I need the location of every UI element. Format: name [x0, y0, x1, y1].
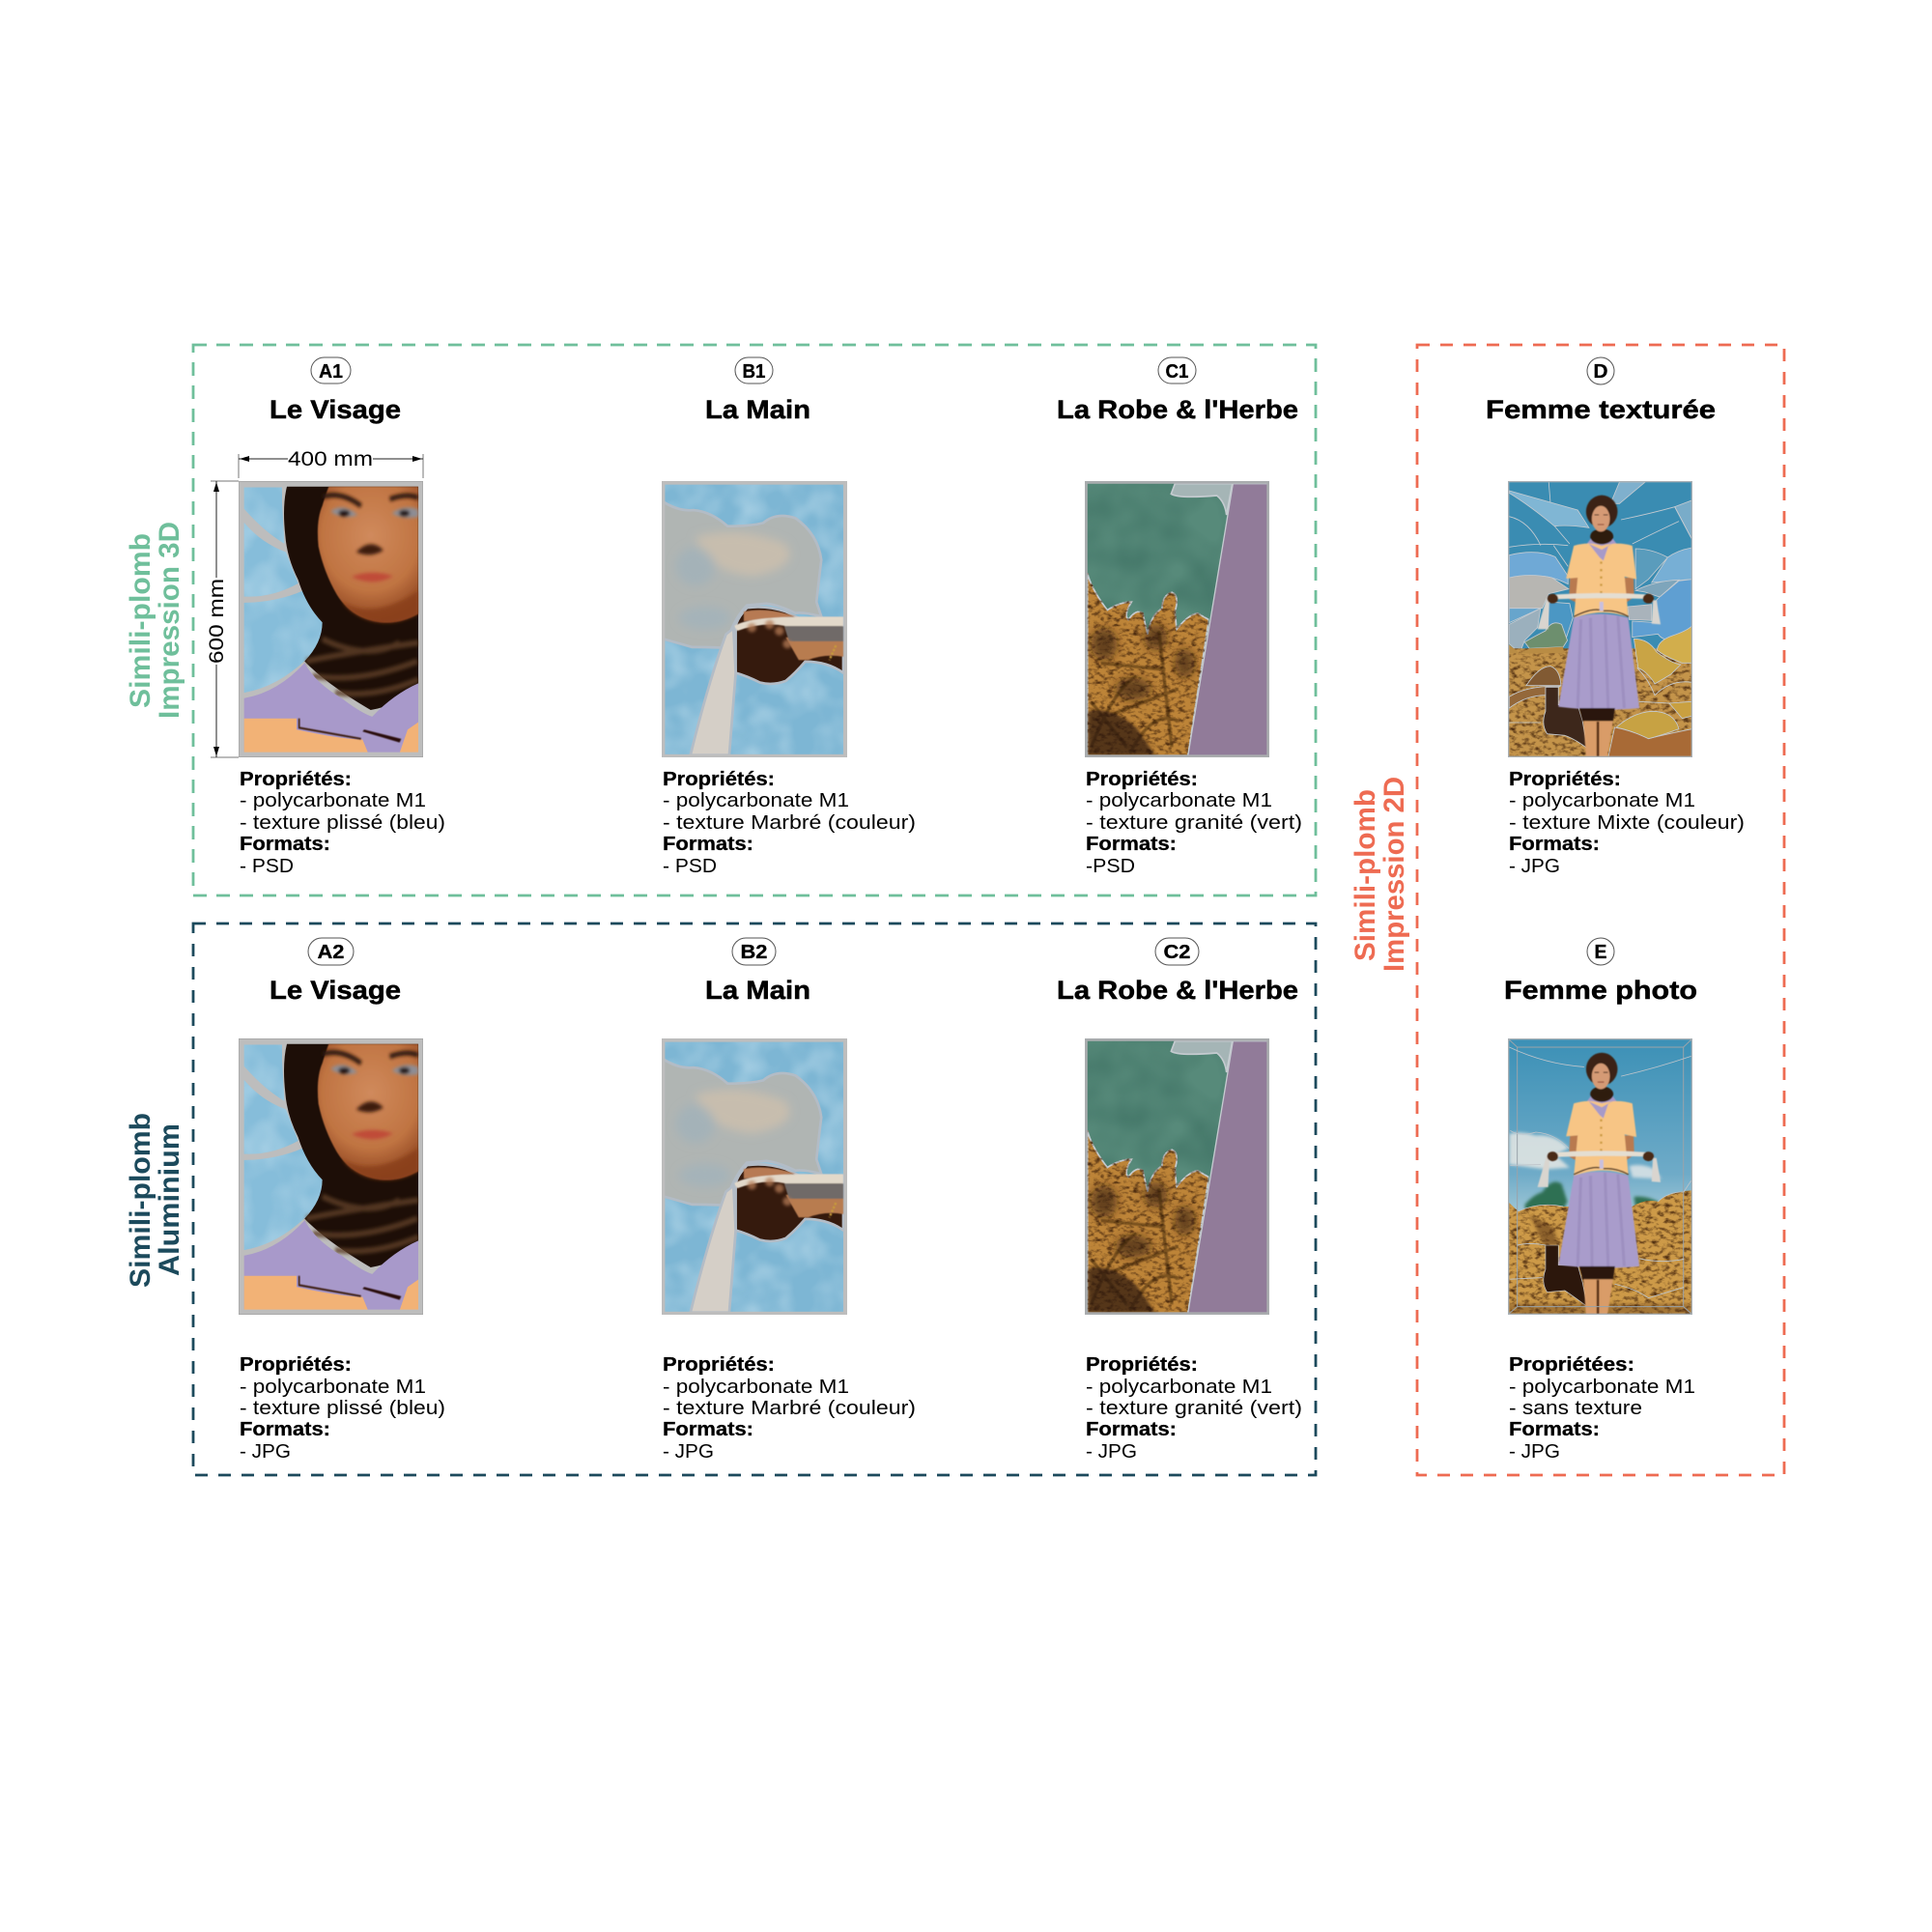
properties A1 [240, 768, 445, 877]
properties C2: - texture granité (vert) [1086, 1397, 1302, 1419]
properties D: - polycarbonate M1 [1509, 789, 1695, 811]
properties A2: Formats: [240, 1418, 330, 1440]
properties E [1509, 1353, 1695, 1463]
panel: Simili-plomb Impression 3D [125, 345, 1316, 895]
properties C2: - polycarbonate M1 [1086, 1376, 1272, 1398]
properties C2: Propriétés: [1086, 1353, 1198, 1376]
badge A2 [308, 938, 354, 965]
properties A1: - polycarbonate M1 [240, 789, 426, 811]
properties C1: - texture granité (vert) [1086, 811, 1302, 834]
badge D [1587, 357, 1614, 384]
properties D: - JPG [1509, 855, 1560, 877]
product E [1504, 938, 1697, 1463]
properties E: Formats: [1509, 1418, 1600, 1440]
properties B2: - texture Marbré (couleur) [663, 1397, 916, 1419]
label: Simili-plomb Impression 2D: Impression 2D [1378, 777, 1410, 972]
product C2 [1057, 938, 1302, 1463]
properties B1: - PSD [663, 855, 717, 877]
properties C1: -PSD [1086, 855, 1135, 877]
properties A1: - texture plissé (bleu) [240, 811, 445, 834]
properties B2 [663, 1353, 916, 1463]
panel: Simili-plomb Impression 2D [1350, 345, 1784, 1475]
properties D [1509, 768, 1745, 877]
label: Simili-plomb Aluminium: Simili-plomb [125, 1113, 156, 1288]
product C1 [1057, 357, 1302, 877]
image: la main texture [662, 481, 847, 757]
label: Simili-plomb Aluminium [125, 1113, 185, 1288]
label: Simili-plomb Impression 2D [1350, 777, 1410, 972]
image: la robe et herbe texture [1085, 481, 1269, 757]
badge C1 [1158, 357, 1196, 384]
title La Main: La Main [705, 395, 810, 424]
properties E: - sans texture [1509, 1397, 1642, 1419]
properties C2 [1086, 1353, 1302, 1463]
properties B2: - polycarbonate M1 [663, 1376, 849, 1398]
properties B2: - JPG [663, 1440, 714, 1463]
label: Simili-plomb Impression 3D: Impression 3D [154, 522, 185, 719]
image: le visage aluminium [239, 1038, 423, 1315]
badge A2: A2 [317, 942, 344, 963]
properties E: - JPG [1509, 1440, 1560, 1463]
dimension: 400 mm [239, 448, 423, 478]
image: le visage texture [239, 481, 423, 757]
badge D: D [1594, 361, 1607, 383]
title Le Visage: Le Visage [270, 395, 401, 424]
properties A2: - JPG [240, 1440, 291, 1463]
badge E [1587, 938, 1614, 965]
properties D: - texture Mixte (couleur) [1509, 811, 1745, 834]
image: la main aluminium [662, 1038, 847, 1315]
properties B1: Formats: [663, 833, 753, 855]
label: Simili-plomb Impression 2D: Simili-plomb [1350, 789, 1381, 961]
label: Simili-plomb Aluminium: Aluminium [154, 1123, 185, 1276]
properties D: Propriétés: [1509, 768, 1621, 790]
properties B1 [663, 768, 916, 877]
badge A1 [311, 357, 351, 384]
image: la robe et herbe aluminium [1085, 1038, 1269, 1315]
properties A1: Propriétés: [240, 768, 352, 790]
badge B2 [732, 938, 776, 965]
properties C2: Formats: [1086, 1418, 1177, 1440]
title La Robe & l'Herbe: La Robe & l'Herbe [1057, 976, 1298, 1005]
badge C2 [1155, 938, 1199, 965]
properties A2: - texture plissé (bleu) [240, 1397, 445, 1419]
title Femme texturée: Femme texturée [1486, 395, 1716, 424]
image: femme texturee vitrail [1508, 481, 1692, 757]
badge B1: B1 [742, 361, 765, 383]
label: Simili-plomb Impression 3D: Simili-plomb [125, 533, 156, 708]
dimension: 600 mm: 600 mm [206, 579, 228, 664]
product A2 [239, 938, 445, 1463]
properties C1 [1086, 768, 1302, 877]
label: Simili-plomb Impression 3D [125, 522, 185, 719]
product B2 [662, 938, 916, 1463]
badge C2: C2 [1163, 942, 1190, 963]
badge B2: B2 [740, 942, 767, 963]
title La Main: La Main [705, 976, 810, 1005]
badge B1 [735, 357, 773, 384]
product B1 [662, 357, 916, 877]
title La Robe & l'Herbe: La Robe & l'Herbe [1057, 395, 1298, 424]
product D [1486, 357, 1745, 877]
properties B2: Propriétés: [663, 1353, 775, 1376]
properties E: - polycarbonate M1 [1509, 1376, 1695, 1398]
title Femme photo: Femme photo [1504, 976, 1697, 1005]
properties A2 [240, 1353, 445, 1463]
properties A1: - PSD [240, 855, 294, 877]
dimension: 600 mm [206, 481, 239, 757]
properties C1: - polycarbonate M1 [1086, 789, 1272, 811]
properties B2: Formats: [663, 1418, 753, 1440]
title Le Visage: Le Visage [270, 976, 401, 1005]
properties D: Formats: [1509, 833, 1600, 855]
badge C1: C1 [1165, 361, 1188, 383]
properties C1: Formats: [1086, 833, 1177, 855]
properties B1: Propriétés: [663, 768, 775, 790]
properties B1: - polycarbonate M1 [663, 789, 849, 811]
properties A2: - polycarbonate M1 [240, 1376, 426, 1398]
dimension: 400 mm: 400 mm [288, 448, 373, 470]
properties A1: Formats: [240, 833, 330, 855]
properties A2: Propriétés: [240, 1353, 352, 1376]
properties B1: - texture Marbré (couleur) [663, 811, 916, 834]
properties C1: Propriétés: [1086, 768, 1198, 790]
product A1 [206, 357, 445, 877]
badge E: E [1594, 942, 1607, 963]
badge A1: A1 [319, 361, 343, 383]
properties C2: - JPG [1086, 1440, 1137, 1463]
properties E: Propriétées: [1509, 1353, 1634, 1376]
image: femme photo [1508, 1038, 1692, 1316]
panel: Simili-plomb Aluminium [125, 923, 1316, 1475]
